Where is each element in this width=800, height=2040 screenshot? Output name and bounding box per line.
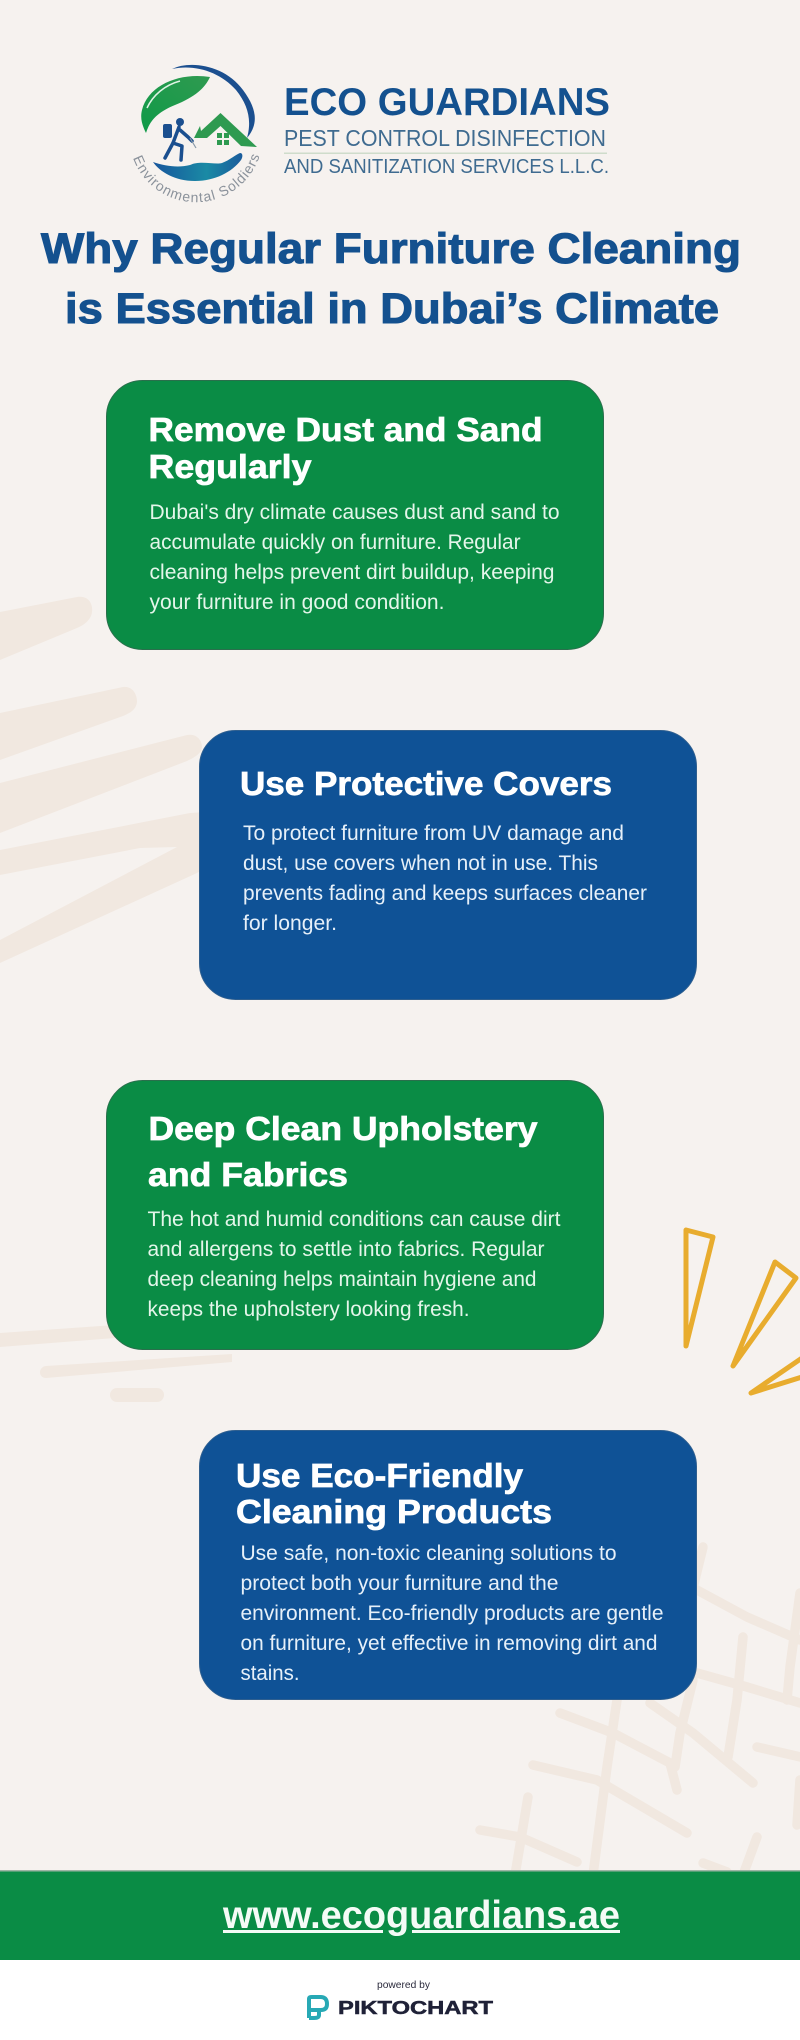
heading: deep clean upholstery and fabrics bbox=[148, 1110, 538, 1193]
heading: remove dust and sand regularly: Remove Dust and Sand bbox=[148, 411, 542, 448]
text block: protective covers description: for longer. bbox=[243, 911, 337, 935]
text block: protective covers description: prevents fading and keeps surfaces cleaner bbox=[243, 881, 647, 905]
heading: remove dust and sand regularly: Regularly bbox=[148, 448, 312, 485]
text block: dust and sand description: accumulate quickly on furniture. Regular bbox=[150, 530, 520, 554]
panel: remove dust and sand bbox=[106, 380, 604, 650]
logo wordmark: AND SANITIZATION SERVICES L.L.C. bbox=[284, 156, 609, 178]
heading: deep clean upholstery and fabrics: and Fabrics bbox=[148, 1156, 348, 1193]
text block: dust and sand description: your furniture in good condition. bbox=[150, 590, 444, 614]
heading: use eco-friendly cleaning products: Use Eco-Friendly bbox=[236, 1457, 524, 1494]
piktochart credit: PIKTOCHART bbox=[338, 1998, 493, 2018]
text block: eco-friendly description: protect both your furniture and the bbox=[240, 1571, 558, 1595]
text block: upholstery description: deep cleaning helps maintain hygiene and bbox=[148, 1267, 536, 1291]
text block: dust and sand description: cleaning helps prevent dirt buildup, keeping bbox=[150, 560, 554, 584]
icon: logo emblem bbox=[133, 64, 259, 202]
piktochart credit: powered by bbox=[377, 1979, 431, 1991]
text block: upholstery description bbox=[148, 1207, 561, 1321]
logo wordmark bbox=[284, 81, 610, 178]
panel: deep clean upholstery bbox=[106, 1080, 604, 1350]
title: Why Regular Furniture Cleaning bbox=[41, 225, 741, 273]
text block: upholstery description: keeps the upholstery looking fresh. bbox=[148, 1297, 470, 1321]
text block: eco-friendly description: environment. Eco-friendly products are gentle bbox=[240, 1601, 664, 1625]
heading: use protective covers: Use Protective Covers bbox=[240, 765, 612, 802]
title: is Essential in Dubai’s Climate bbox=[65, 285, 719, 333]
text block: protective covers description: dust, use covers when not in use. This bbox=[243, 851, 598, 875]
logo wordmark: ECO GUARDIANS bbox=[284, 81, 610, 124]
website url: www.ecoguardians.ae bbox=[222, 1894, 620, 1937]
text block: upholstery description: and allergens to settle into fabrics. Regular bbox=[148, 1237, 544, 1261]
heading: use eco-friendly cleaning products bbox=[236, 1457, 552, 1530]
text block: dust and sand description: Dubai's dry climate causes dust and sand to bbox=[150, 500, 560, 524]
title bbox=[41, 225, 741, 333]
text block: eco-friendly description: on furniture, yet effective in removing dirt and bbox=[240, 1631, 658, 1655]
text block: dust and sand description bbox=[150, 500, 560, 614]
text block: upholstery description: The hot and humid conditions can cause dirt bbox=[148, 1207, 561, 1231]
icon: yellow spark triangles bbox=[686, 1230, 800, 1393]
text block: protective covers description: To protect furniture from UV damage and bbox=[243, 821, 624, 845]
logo: Eco Guardians bbox=[133, 64, 610, 202]
logo wordmark: PEST CONTROL DISINFECTION bbox=[284, 125, 606, 151]
panel: use protective covers bbox=[200, 730, 696, 1000]
footer band: website bbox=[0, 1870, 800, 1960]
heading: remove dust and sand regularly bbox=[148, 411, 542, 485]
heading: use eco-friendly cleaning products: Cleaning Products bbox=[236, 1493, 552, 1530]
heading: deep clean upholstery and fabrics: Deep Clean Upholstery bbox=[148, 1110, 538, 1147]
text block: eco-friendly description: Use safe, non-toxic cleaning solutions to bbox=[240, 1541, 617, 1565]
icon: piktochart logo bbox=[309, 1997, 327, 2018]
text block: eco-friendly description bbox=[240, 1541, 664, 1685]
icon: logo emblem: Environmental Soldiers bbox=[133, 154, 259, 202]
text block: eco-friendly description: stains. bbox=[240, 1661, 300, 1685]
piktochart credit bbox=[309, 1979, 493, 2018]
text block: protective covers description bbox=[243, 821, 647, 935]
panel: eco-friendly cleaning products bbox=[200, 1430, 696, 1700]
